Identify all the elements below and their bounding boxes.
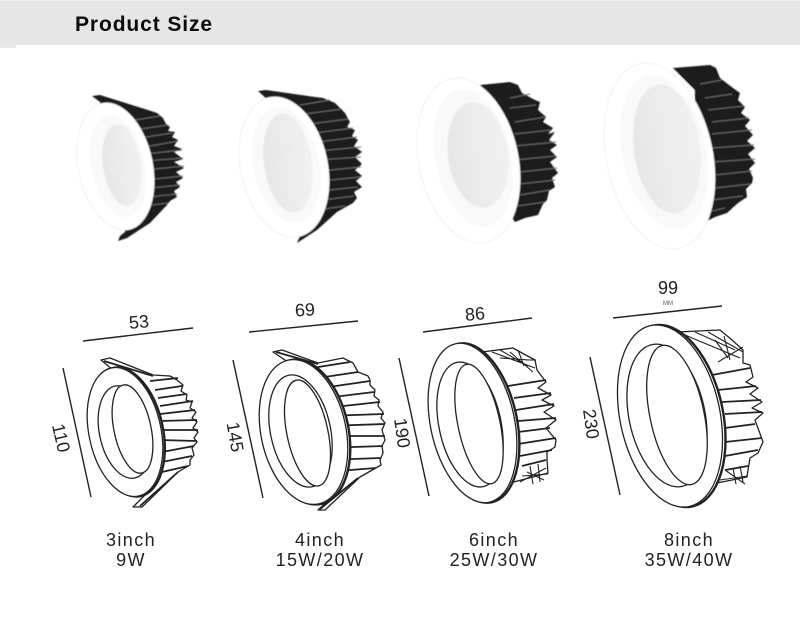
heat sink (677, 330, 763, 484)
heat sink (101, 358, 198, 507)
photo: 4 inch downlight (227, 89, 362, 245)
dimension: height 230 (579, 357, 620, 495)
dimension: width 99: MM (663, 301, 673, 307)
dimension: height 190: 190 (390, 417, 414, 449)
drawing: 8 inch with dimensions (579, 278, 763, 517)
drawing: 4 inch with dimensions (223, 299, 385, 513)
dimension: width 53 (83, 311, 193, 341)
dimension: width 99: 99 (658, 278, 678, 298)
dimension: width 86 (423, 303, 532, 332)
dimension: height 190 (390, 358, 429, 496)
dimension: height 145: 145 (223, 420, 247, 454)
label: 8 inch 35W/40W: 35W/40W (645, 550, 733, 570)
dimension: height 230: 230 (579, 408, 603, 440)
dimension: width 86: 86 (464, 303, 486, 325)
label: 3 inch 9W: 3inch (106, 530, 156, 550)
photo: 6 inch downlight (403, 68, 558, 253)
dimension: height 110 (48, 368, 91, 497)
housing ring (415, 335, 533, 511)
drawing: 6 inch with dimensions (390, 303, 556, 511)
housing ring (76, 360, 176, 504)
heat sink (482, 348, 556, 484)
dimension: width 99 (613, 278, 722, 318)
drawing: 3 inch with dimensions (48, 311, 198, 507)
label: 4 inch 15W/20W: 4inch (295, 530, 345, 550)
header bar (0, 0, 800, 48)
heat sink (273, 350, 385, 510)
label: 8 inch 35W/40W: 8inch (664, 530, 714, 550)
dimension: width 69 (249, 299, 358, 332)
dimension: height 145 (223, 360, 263, 498)
title: Product Size (75, 13, 213, 36)
label: 6 inch 25W/30W: 6inch (469, 530, 519, 550)
label: 4 inch 15W/20W: 15W/20W (276, 550, 364, 570)
dimension: width 69: 69 (294, 299, 316, 321)
dimension: width 53: 53 (128, 311, 150, 333)
dimension: height 110: 110 (48, 422, 74, 454)
photo: 8 inch downlight (588, 53, 755, 259)
housing ring (602, 315, 741, 517)
photo: 3 inch downlight (66, 95, 184, 241)
label: 6 inch 25W/30W: 25W/30W (450, 550, 538, 570)
housing ring (247, 351, 363, 513)
label: 3 inch 9W: 9W (116, 550, 146, 570)
